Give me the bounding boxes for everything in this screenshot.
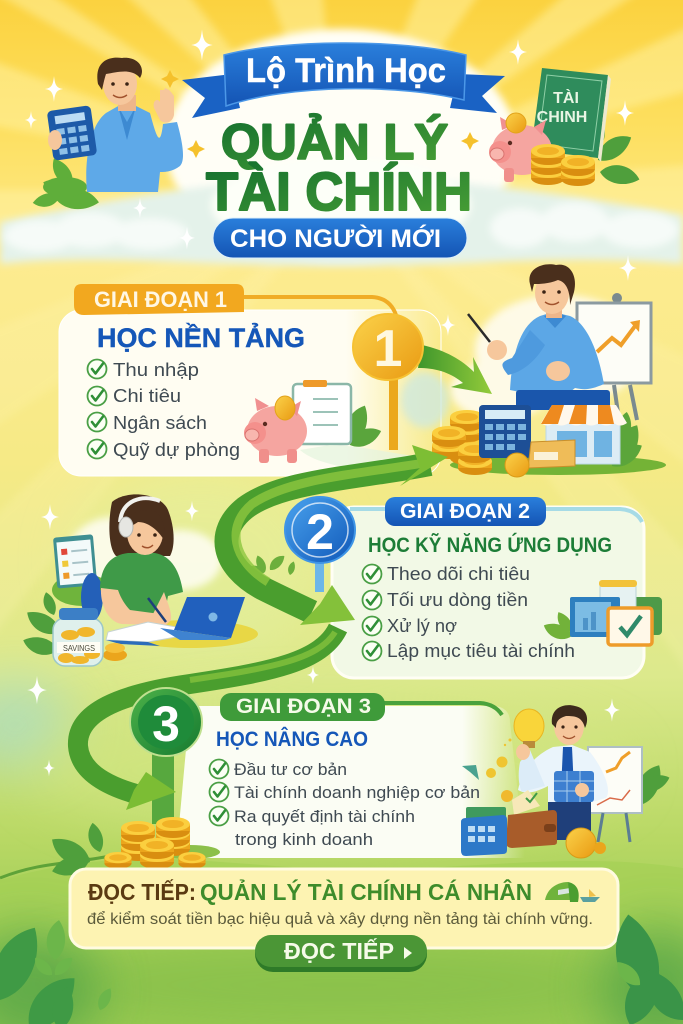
- book label: TÀI: [553, 88, 579, 107]
- panel: stage 3: [176, 693, 525, 858]
- shop: [541, 405, 627, 464]
- stage 1 checklist: Ngân sách: [113, 413, 207, 433]
- book label: [537, 88, 587, 126]
- icon: businessman with bulb, wallet and chart: [461, 705, 672, 858]
- panel: stage 2: [332, 497, 662, 678]
- stage 3 checklist: Ra quyết định tài chính: [234, 807, 415, 826]
- connector line stage 1: [240, 297, 396, 315]
- stage 1 number badge: 1: [374, 320, 402, 378]
- foliage bottom right: [609, 911, 683, 1024]
- stage 2 checklist: [362, 564, 575, 661]
- book label: CHINH: [537, 109, 587, 126]
- icon: clipboard, piggy bank and plant: [244, 380, 384, 463]
- ribbon title text: Lộ Trình Học: [246, 52, 446, 90]
- icon: charts, jar and check card: [541, 580, 662, 645]
- icon: presenter with chart and shop: [401, 264, 666, 477]
- calculator: [461, 807, 507, 856]
- stage 1 tag: GIAI ĐOẠN 1: [94, 287, 227, 312]
- panel: stage 1: [59, 284, 441, 476]
- stage 2 tag: [385, 497, 546, 526]
- button: read more: ĐỌC TIẾP: [284, 937, 394, 964]
- stage 3 number badge: [130, 688, 202, 756]
- light bulb: [514, 709, 544, 760]
- savings jar: SAVINGS: [63, 643, 95, 653]
- stage 1 heading: HỌC NỀN TẢNG: [97, 321, 305, 353]
- icon: woman studying with laptop and savings jar: [21, 494, 258, 666]
- stage 1 checklist: Thu nhập: [113, 360, 199, 380]
- stage 3 checklist: Đầu tư cơ bản: [234, 760, 347, 779]
- arrow head stage 2: [300, 585, 355, 625]
- icon: finance book, piggy bank and coins: [489, 68, 642, 189]
- stage 2 checklist: Tối ưu dòng tiền: [387, 590, 528, 610]
- stage 3 tag: [220, 693, 385, 721]
- sparkles middle: [27, 314, 620, 776]
- savings jar: [53, 608, 103, 666]
- calculator: [479, 405, 531, 458]
- package and coin: [505, 440, 575, 477]
- stage 1 number badge: [353, 314, 423, 450]
- thin road: [300, 445, 440, 478]
- stage 1 tag: [74, 284, 244, 315]
- stage 3 checklist: Tài chính doanh nghiệp cơ bản: [234, 783, 480, 802]
- arrow: curved path from stage 2 to stage 1: [226, 445, 448, 625]
- checklist tablet: [53, 534, 97, 589]
- stage 3 checklist: [210, 760, 480, 849]
- callout description: để kiểm soát tiền bạc hiệu quả và xây dựng nền tảng tài chính vững.: [87, 911, 593, 928]
- main title: QUẢN LÝ: [221, 114, 448, 170]
- stage 1 checklist: Chi tiêu: [113, 386, 181, 406]
- callout heading: QUẢN LÝ TÀI CHÍNH CÁ NHÂN: [200, 877, 532, 905]
- stage 2 checklist: Xử lý nợ: [387, 616, 457, 636]
- callout heading: ĐỌC TIẾP:: [88, 878, 196, 905]
- button: read more: [255, 935, 427, 972]
- coins: [432, 410, 492, 475]
- callout heading: [88, 877, 532, 905]
- stage 3 heading: HỌC NÂNG CAO: [216, 727, 368, 751]
- stage 2 number badge: 2: [306, 504, 334, 560]
- arrow: stage 1 to presenter: [418, 345, 492, 394]
- stage 2 tag: GIAI ĐOẠN 2: [400, 500, 530, 523]
- stage 2 checklist: Lập mục tiêu tài chính: [387, 641, 575, 661]
- wallet: [501, 790, 557, 848]
- main title: [206, 114, 472, 222]
- icon: green piggy and boat: [545, 882, 600, 902]
- title ribbon: [182, 43, 505, 118]
- stage 3 badge stem: [152, 750, 174, 824]
- stage 3 number badge: 3: [152, 696, 180, 752]
- main title: TÀI CHÍNH: [206, 162, 472, 222]
- stage 2 number badge: [285, 497, 355, 592]
- arrow head stage 3: [126, 772, 176, 810]
- foliage bottom left: [0, 919, 116, 1024]
- subtitle pill: [213, 218, 467, 258]
- sky clouds and mist behind title: [0, 29, 683, 266]
- arrow: curved path from stage 3 to stage 2: [78, 628, 338, 810]
- plants: [607, 411, 646, 471]
- stage 2 checklist: Theo dõi chi tiêu: [387, 564, 530, 584]
- whiteboard: [577, 293, 651, 420]
- panel: read next callout: [70, 869, 618, 948]
- subtitle pill: CHO NGƯỜI MỚI: [230, 223, 441, 253]
- stage 3 checklist: trong kinh doanh: [235, 830, 373, 849]
- stage 1 checklist: Quỹ dự phòng: [113, 440, 240, 460]
- icon: man with calculator: [32, 58, 183, 213]
- sparkles top: [25, 29, 637, 281]
- stage 1 checklist: [88, 360, 240, 460]
- icon: coin piles and plants left: [47, 817, 220, 880]
- stage 3 tag: GIAI ĐOẠN 3: [236, 695, 371, 718]
- sprout plant: [246, 553, 297, 577]
- stage 2 heading: HỌC KỸ NĂNG ỨNG DỤNG: [368, 533, 612, 557]
